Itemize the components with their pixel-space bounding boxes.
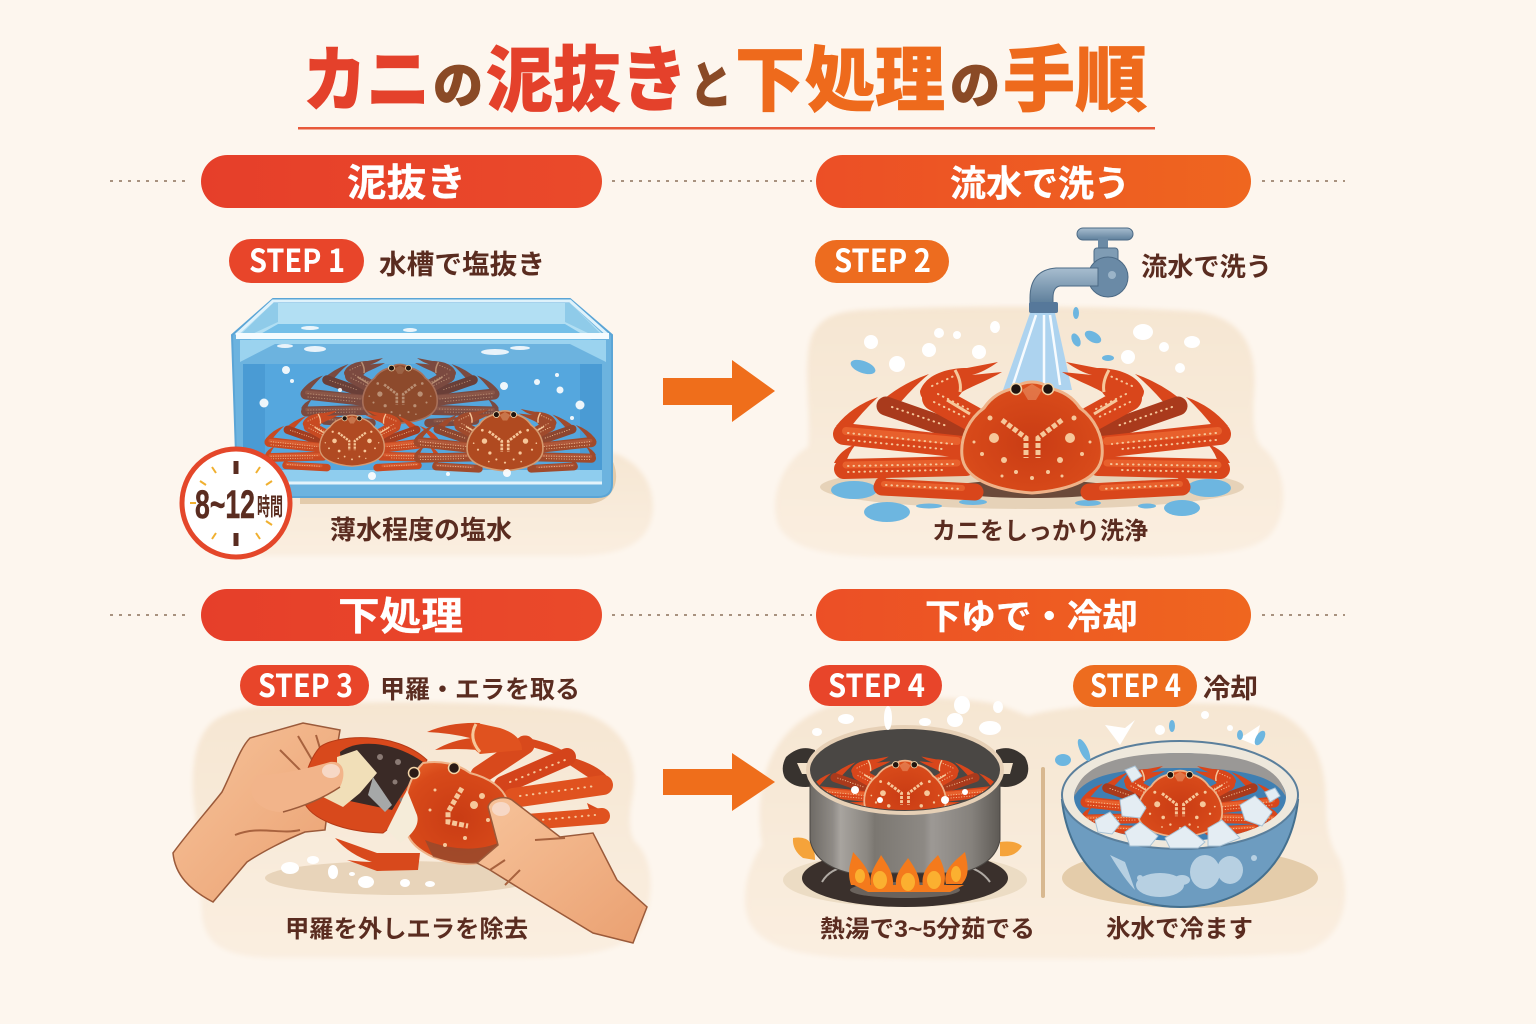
hand: left: [173, 723, 340, 902]
timer: 8~12: [195, 483, 255, 527]
pot: [783, 727, 1028, 873]
step 2 caption: カニをしっかり洗浄: [932, 518, 1148, 545]
steam bubbles: [812, 696, 1003, 736]
step 4 badge: chill: STEP 4: [1090, 661, 1181, 707]
panel: step 4 boil and chill: [745, 661, 1345, 959]
crab: hero: [834, 362, 1230, 498]
step 1 badge: STEP 1: [249, 236, 345, 282]
faucet: [1029, 228, 1133, 313]
title: の: [433, 58, 483, 114]
backdrop blob: [745, 698, 1345, 959]
title: の: [950, 58, 1000, 114]
section header: 泥抜き: 泥抜き: [347, 163, 466, 205]
crab: removed shell: [303, 738, 427, 833]
section header: 泥抜き: [201, 155, 602, 208]
step 2 badge: STEP 2: [834, 236, 931, 282]
timer: 時間: [257, 494, 283, 521]
timer: [182, 449, 290, 557]
section header: 下処理: [201, 589, 602, 641]
counter stain and droplets: [265, 856, 535, 895]
crab: front right: [414, 409, 596, 471]
step 3 badge: STEP 3: [258, 661, 353, 707]
panel: step 1 tank: [182, 236, 653, 557]
step 3 label: 甲羅・エラを取る: [380, 676, 580, 704]
section header: 下ゆで・冷却: 下ゆで・冷却: [925, 598, 1138, 637]
panel: step 2 wash: [775, 228, 1283, 557]
arrow: step 1 to step 2: [663, 360, 775, 422]
crab: in ice water: [1081, 766, 1279, 837]
crab: legs and claws: [335, 723, 610, 871]
aquarium: [232, 299, 612, 497]
chill caption: 氷水で冷ます: [1106, 915, 1253, 943]
step 3 caption: 甲羅を外しエラを除去: [285, 916, 528, 943]
chill label: 冷却: [1203, 674, 1258, 704]
cold splashes: [1055, 711, 1267, 766]
backdrop blob: [775, 306, 1283, 557]
section header: 下ゆで・冷却: [816, 589, 1251, 641]
crab: body: [387, 762, 515, 864]
water stream: [1003, 313, 1072, 390]
title: 泥抜き: [486, 42, 688, 121]
flames: [849, 852, 968, 892]
stove: [783, 837, 1027, 907]
step 4 badge: boil: STEP 4: [828, 661, 925, 707]
splashes: [820, 307, 1244, 522]
title: 手順: [1003, 42, 1147, 121]
hand: right: [477, 798, 647, 943]
step 1 caption: 薄水程度の塩水: [330, 515, 512, 545]
crab: in pot: [816, 756, 994, 810]
bowl: [1062, 741, 1318, 908]
section header: 下処理: 下処理: [338, 596, 463, 639]
step 2 label: 流水で洗う: [1141, 252, 1272, 282]
crab: back, underwater: [301, 358, 499, 423]
panel: step 3 prep: [173, 661, 651, 958]
backdrop blob: [260, 448, 653, 556]
backdrop blob: [193, 702, 651, 958]
boil caption: 熱湯で3~5分茹でる: [820, 916, 1035, 943]
arrow: step 3 to step 4: [663, 753, 775, 811]
hand: left thumb: [251, 762, 343, 812]
title: と: [690, 58, 732, 114]
title: カニ: [303, 42, 430, 121]
section header: 流水で洗う: [816, 155, 1251, 208]
ice cubes: [1095, 766, 1280, 848]
crab: front left: [265, 410, 439, 468]
section header: 流水で洗う: 流水で洗う: [950, 163, 1130, 204]
title: [303, 42, 1147, 121]
step 1 label: 水槽で塩抜き: [379, 250, 545, 280]
title: 下処理: [735, 42, 945, 121]
tank shadow: [300, 452, 616, 504]
